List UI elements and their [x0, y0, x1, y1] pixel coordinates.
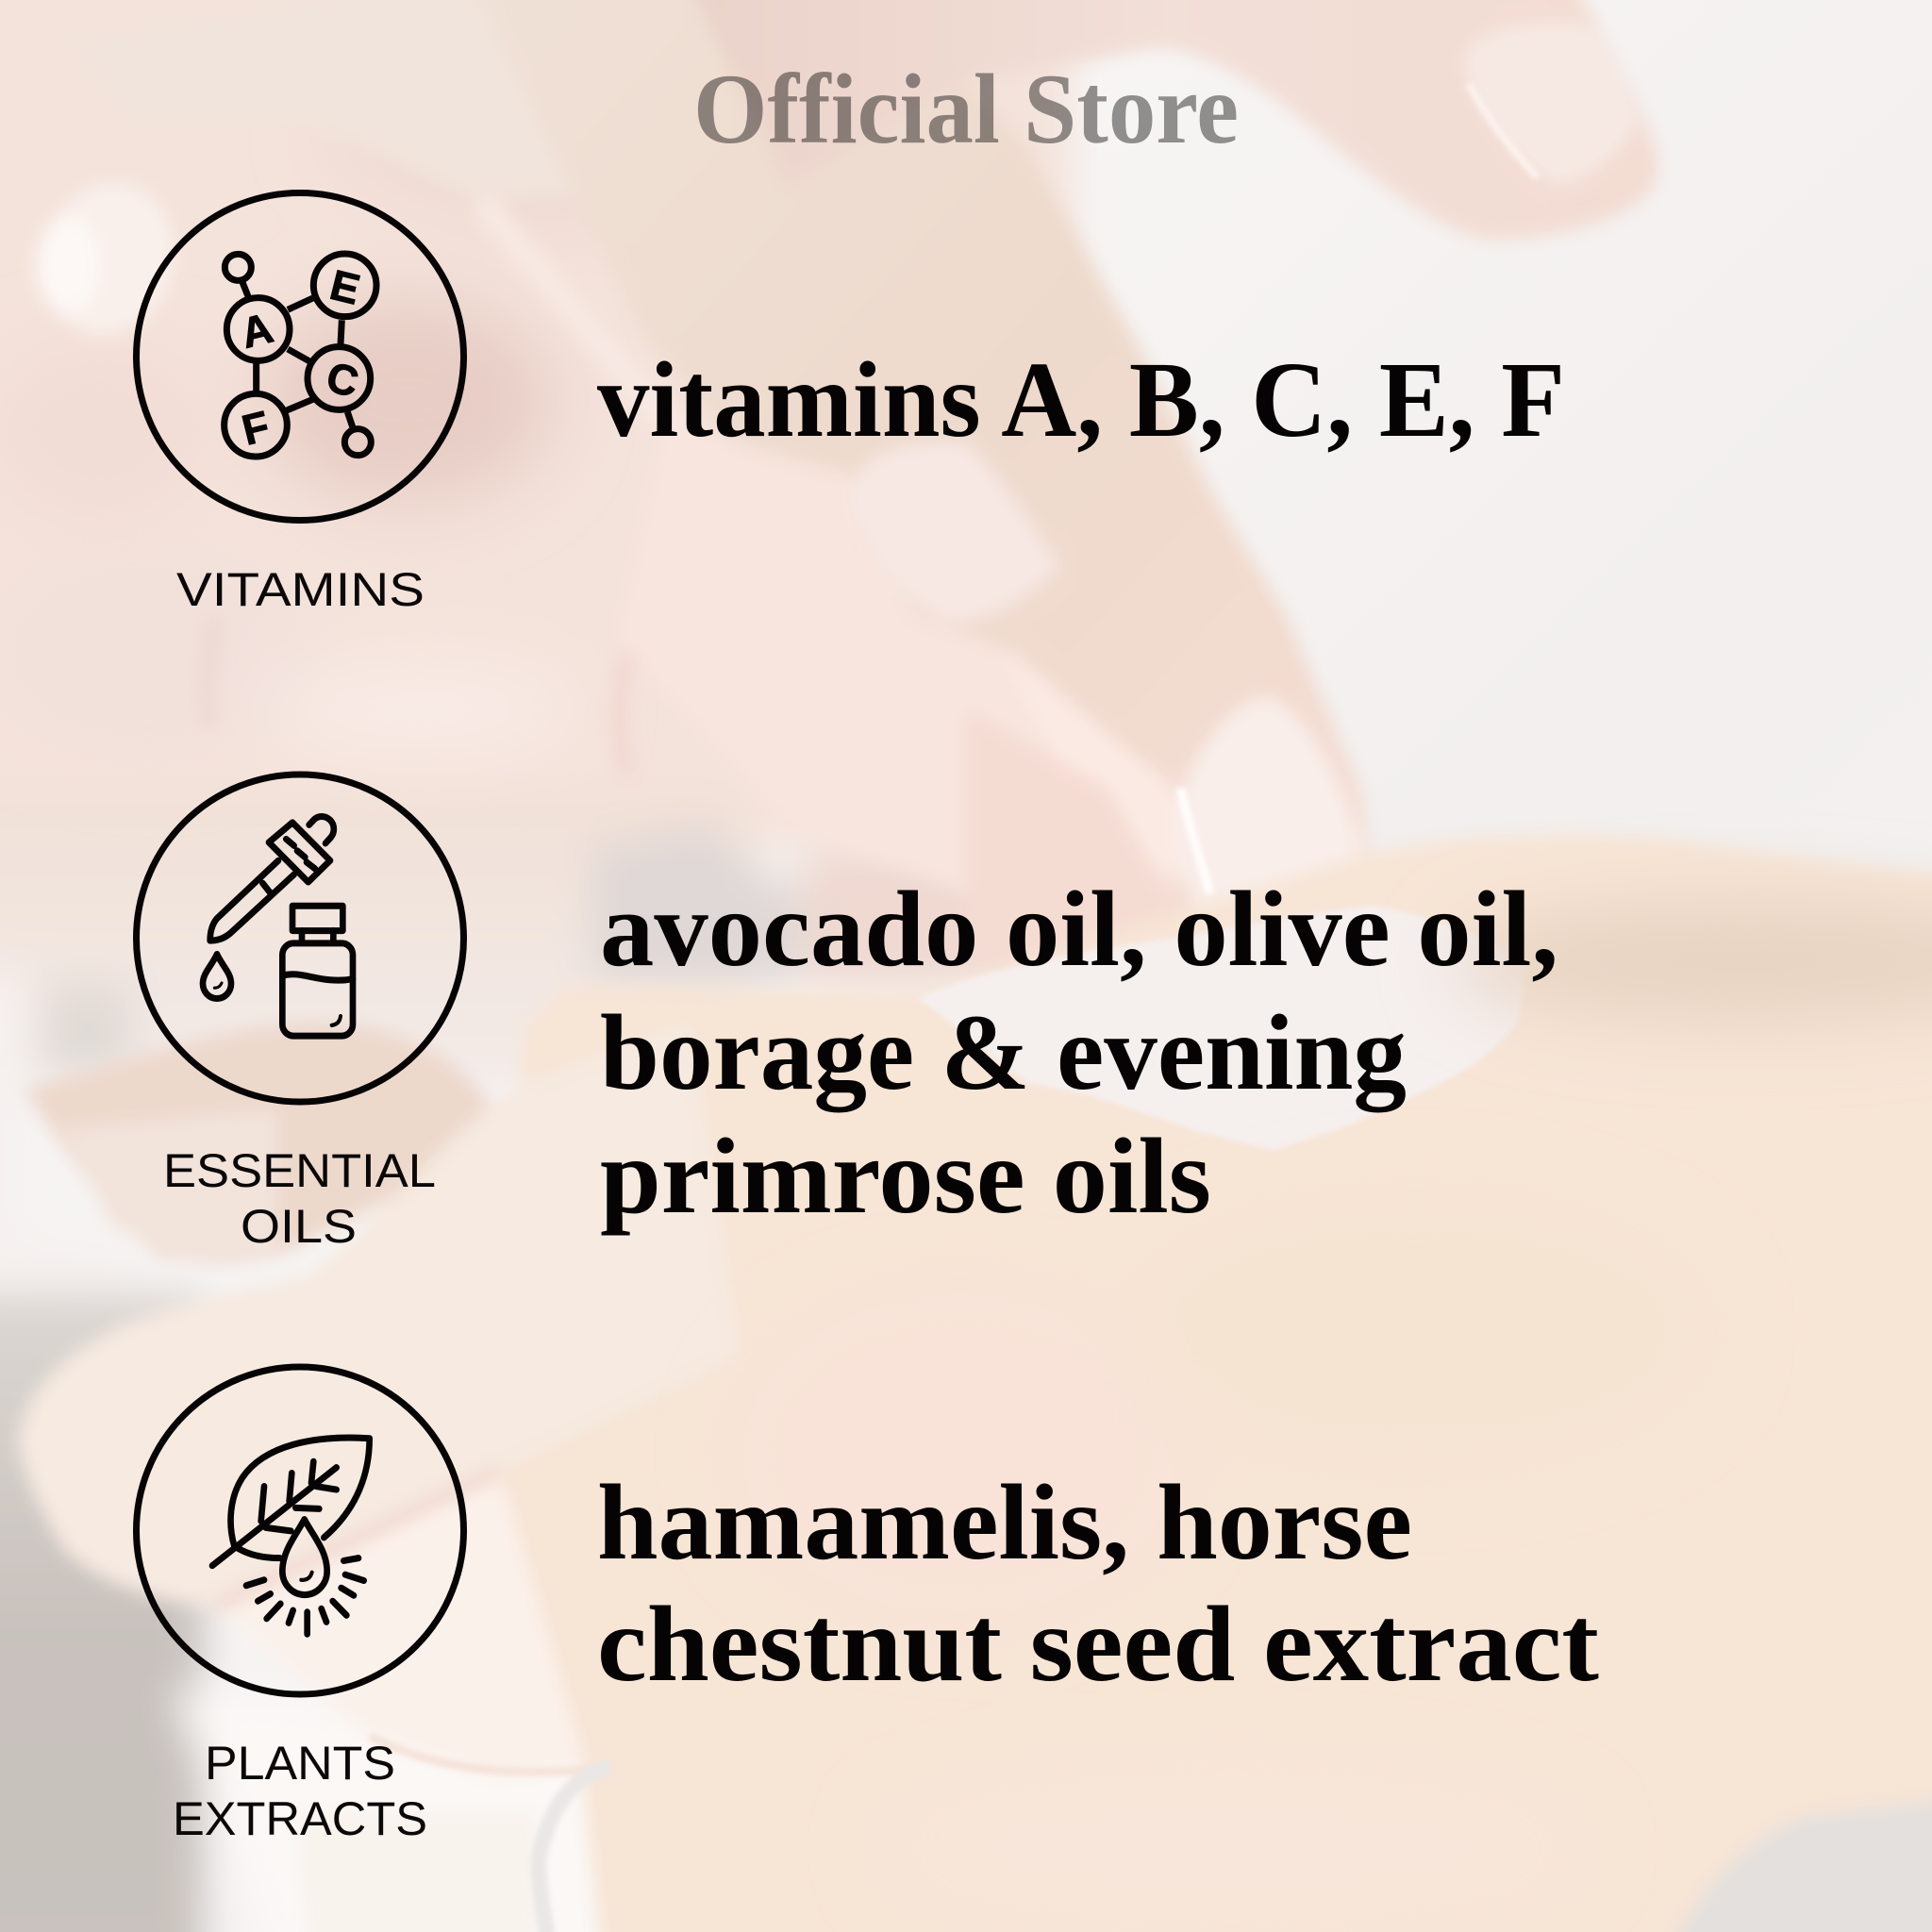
panel: plants extracts	[136, 1367, 1599, 1845]
icon: leaf with drop	[136, 1367, 464, 1694]
icon: dropper and bottle	[136, 774, 464, 1102]
panel: vitamins	[136, 192, 1565, 616]
icon: vitamins molecule: A	[236, 304, 277, 358]
icon: vitamins molecule: E	[325, 260, 364, 314]
icon: vitamins molecule	[136, 192, 464, 521]
label: PLANTS EXTRACTS	[173, 1737, 427, 1845]
label: ESSENTIAL OILS: ESSENTIAL	[163, 1144, 436, 1197]
icon: vitamins molecule: F	[237, 402, 274, 455]
text: oils list: borage & evening	[600, 992, 1407, 1112]
label: ESSENTIAL OILS	[163, 1144, 436, 1253]
panel: essential oils	[136, 774, 1558, 1253]
label: ESSENTIAL OILS: OILS	[241, 1200, 357, 1253]
text: plant extracts list: chestnut seed extract	[597, 1584, 1599, 1704]
text: oils list	[600, 869, 1558, 1236]
label: VITAMINS: VITAMINS	[176, 563, 425, 616]
title: Official Store: Official Store	[693, 54, 1239, 164]
text: vitamins list: vitamins A, B, C, E, F	[597, 340, 1565, 459]
label: PLANTS EXTRACTS: PLANTS	[205, 1737, 395, 1790]
text: plant extracts list	[597, 1462, 1599, 1704]
text: oils list: avocado oil, olive oil,	[600, 869, 1558, 989]
icon: vitamins molecule: C	[322, 353, 363, 407]
label: PLANTS EXTRACTS: EXTRACTS	[173, 1792, 427, 1845]
text: plant extracts list: hamamelis, horse	[597, 1462, 1412, 1582]
text: oils list: primrose oils	[600, 1116, 1211, 1236]
